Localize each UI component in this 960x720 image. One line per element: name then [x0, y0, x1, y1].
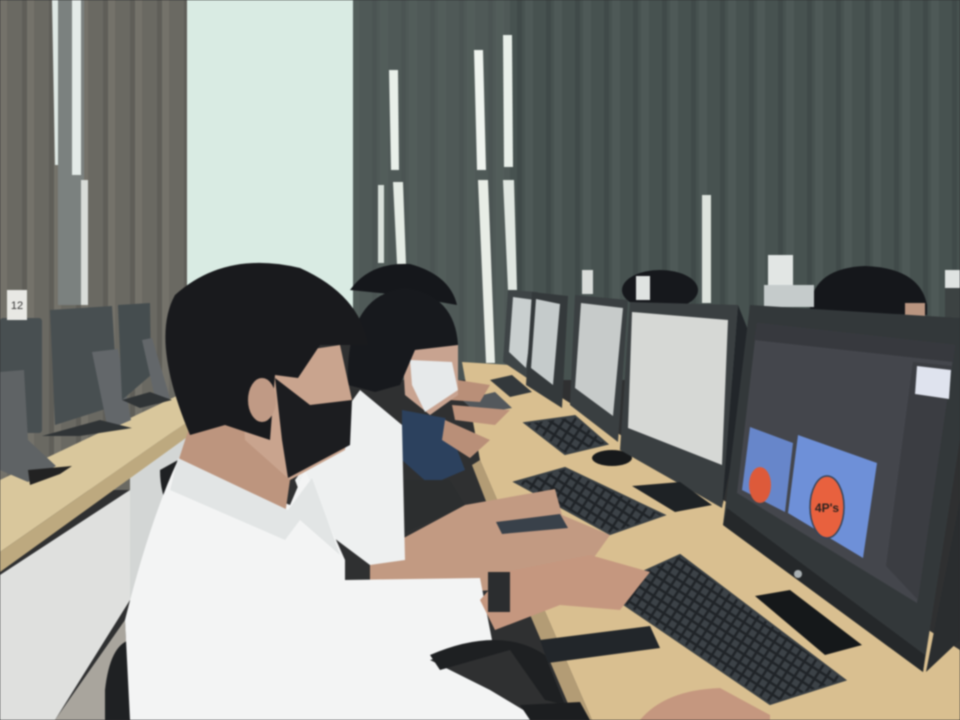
second student [295, 288, 610, 595]
phone in hand [496, 514, 568, 534]
white wall [187, 0, 355, 340]
left row monitors, back view: 12 [11, 300, 23, 312]
right curtain [353, 0, 960, 380]
hair [165, 263, 368, 440]
left row monitors, back view [0, 290, 172, 485]
left curtain [0, 0, 192, 490]
orange badge small [749, 467, 771, 503]
background students and papers [582, 255, 960, 320]
large keyboard [603, 555, 845, 704]
monitor stand [755, 590, 862, 655]
phone on desk [540, 626, 660, 663]
thumbnail preview [915, 366, 951, 399]
black face mask [275, 378, 352, 478]
right desk [462, 362, 960, 720]
monitor with document [620, 302, 748, 512]
large monitor [723, 305, 960, 672]
left desk with cabinets [0, 392, 195, 720]
blue artboard small [742, 427, 793, 512]
keyboard middle [515, 468, 664, 534]
orange badge 4P's: 4P's [815, 501, 839, 515]
chair [105, 460, 178, 720]
blue artboard large [788, 435, 877, 558]
orange badge 4P's [810, 476, 844, 538]
third student [350, 264, 510, 485]
front student [125, 263, 770, 720]
monitor row, far screens [462, 290, 632, 466]
